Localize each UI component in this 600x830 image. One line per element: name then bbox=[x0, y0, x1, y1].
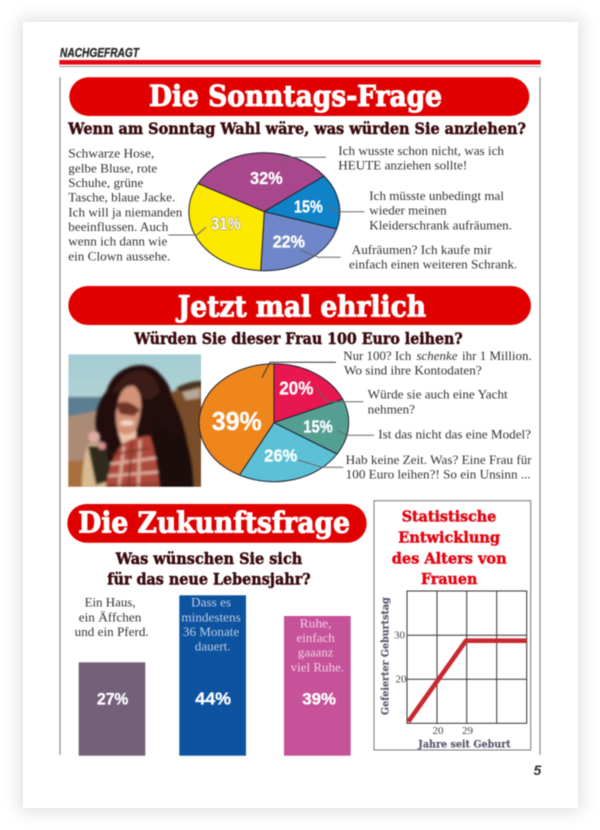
bar: 27%: ein Äffchen bbox=[79, 609, 142, 624]
panel: Statistische Entwicklung bbox=[374, 501, 531, 750]
answer: million: schenke bbox=[416, 348, 458, 363]
bar: 44%: mindestens bbox=[181, 609, 241, 624]
landscape bbox=[68, 395, 103, 418]
pie chart: loan: 26% bbox=[264, 446, 298, 466]
heading banner: Die Sonntags-Frage bbox=[149, 79, 442, 113]
answer: aufräumen: Ich müsste unbedingt mal bbox=[369, 188, 504, 203]
pie chart: clothing: 32% bbox=[250, 168, 283, 188]
arm bbox=[80, 442, 108, 488]
pie chart: clothing: 31% bbox=[211, 213, 241, 233]
answer: million: ihr 1 Million. bbox=[462, 348, 532, 363]
answer: aufräumen: Kleiderschrank aufräumen. bbox=[369, 217, 512, 232]
bar: 27%: Ein Haus, bbox=[85, 595, 136, 610]
answer: aufräumen: wieder meinen bbox=[369, 203, 447, 218]
answer: clown: Schwarze Hose, bbox=[68, 146, 154, 161]
leader lines bbox=[168, 157, 364, 257]
bar: 39%: einfach bbox=[297, 630, 335, 645]
heading banner bbox=[68, 286, 531, 325]
face bbox=[116, 386, 141, 440]
bar: 44% bbox=[179, 595, 246, 756]
pie chart: clothing: 22% bbox=[273, 231, 305, 251]
question: Was wünschen Sie sich bbox=[115, 549, 302, 568]
age line bbox=[408, 641, 527, 722]
heading banner bbox=[69, 77, 529, 116]
pie chart: loan bbox=[199, 364, 349, 482]
panel: Jetzt mal ehrlich bbox=[60, 286, 535, 495]
x axis title: Jahre seit Geburt bbox=[417, 739, 511, 750]
panel: Die Zukunftsfrage bbox=[67, 504, 367, 756]
answer: clown: gelbe Bluse, rote bbox=[68, 160, 158, 175]
bar: 44%: dauert. bbox=[195, 639, 231, 654]
bar: 39% bbox=[284, 615, 351, 756]
bar: 39%: viel Ruhe. bbox=[291, 659, 344, 674]
question: Wenn am Sonntag Wahl wäre, was würden Sie anziehen? bbox=[67, 119, 526, 138]
answer: clown: ein Clown aussehe. bbox=[68, 248, 170, 263]
answer: clown: wenn ich dann wie bbox=[68, 234, 168, 249]
answer: yacht: nehmen? bbox=[368, 401, 415, 416]
question: Würden Sie dieser Frau 100 Euro leihen? bbox=[133, 329, 463, 348]
axis numbers: 20 bbox=[396, 674, 407, 686]
question: für das neue Lebensjahr? bbox=[107, 569, 311, 588]
chart title: des Alters von bbox=[392, 549, 507, 567]
pie chart: loan: 20% bbox=[279, 378, 313, 398]
answer: clown: Tasche, blaue Jacke. bbox=[68, 190, 175, 205]
leader lines bbox=[262, 362, 374, 467]
answer: million: Nur 100? Ich bbox=[343, 348, 412, 363]
answer: heute: HEUTE anziehen sollte! bbox=[338, 157, 467, 172]
leaves and flowers bbox=[88, 446, 112, 485]
axis numbers: 20 bbox=[432, 725, 444, 737]
header red rule bbox=[59, 60, 541, 65]
panel: Die Sonntags-Frage bbox=[67, 77, 529, 271]
axis numbers bbox=[394, 629, 474, 737]
pie chart: clothing bbox=[189, 153, 340, 271]
photo: laughing woman bbox=[68, 354, 202, 488]
chart title: Statistische bbox=[402, 508, 496, 526]
header label: NACHGEFRAGT bbox=[60, 46, 140, 60]
chart title: Entwicklung bbox=[398, 529, 500, 547]
answer: million bbox=[343, 348, 532, 377]
page number: 5 bbox=[534, 762, 542, 778]
axis numbers: 29 bbox=[462, 725, 474, 737]
axis numbers: 30 bbox=[394, 629, 406, 641]
bar chart: wishes bbox=[75, 595, 351, 756]
answer: keine Zeit: 100 Euro leihen?! So ein Unsinn ... bbox=[346, 467, 531, 482]
y axis title: Gefeierter Geburtstag bbox=[380, 597, 391, 715]
bar: 39%: gaaanz bbox=[298, 645, 334, 660]
bar: 44%: Dass es bbox=[191, 595, 231, 610]
bar: 44%: 36 Monate bbox=[183, 624, 239, 639]
pie chart: loan: 39% bbox=[212, 406, 262, 436]
line chart: age bbox=[380, 591, 527, 750]
answer: clown: Schuhe, grüne bbox=[68, 175, 144, 190]
bar: 27% bbox=[75, 595, 149, 756]
answer: clown: beeinflussen. Auch bbox=[68, 219, 169, 234]
pie chart: loan: 15% bbox=[303, 416, 333, 436]
answer: model: Ist das nicht das eine Model? bbox=[378, 426, 531, 441]
heading banner: Die Zukunftsfrage bbox=[78, 506, 350, 540]
bar: 39%: Ruhe, bbox=[300, 615, 332, 630]
page header bbox=[59, 46, 541, 67]
answer: clown: Ich will ja niemanden bbox=[68, 204, 183, 219]
answer: neuer schrank: Aufräumen? Ich kaufe mir bbox=[352, 242, 492, 257]
bar: 39%: 39% bbox=[302, 689, 336, 708]
bar: 44%: 44% bbox=[195, 688, 231, 708]
bar: 27%: und ein Pferd. bbox=[75, 624, 149, 639]
heading banner: Jetzt mal ehrlich bbox=[175, 290, 426, 324]
answer: yacht: Würde sie auch eine Yacht bbox=[368, 387, 508, 402]
chart title: Frauen bbox=[421, 570, 477, 588]
answer: million: Wo sind ihre Kontodaten? bbox=[344, 362, 482, 377]
answer: heute: Ich wusste schon nicht, was ich bbox=[338, 143, 504, 158]
shirt bbox=[105, 436, 160, 495]
answer: keine Zeit: Hab keine Zeit. Was? Eine Frau für bbox=[346, 452, 532, 467]
pie chart: clothing: 15% bbox=[294, 197, 323, 217]
bar: 27%: 27% bbox=[97, 689, 128, 708]
hair bbox=[95, 365, 194, 495]
answer: neuer schrank: einfach einen weiteren Schrank. bbox=[349, 256, 517, 271]
